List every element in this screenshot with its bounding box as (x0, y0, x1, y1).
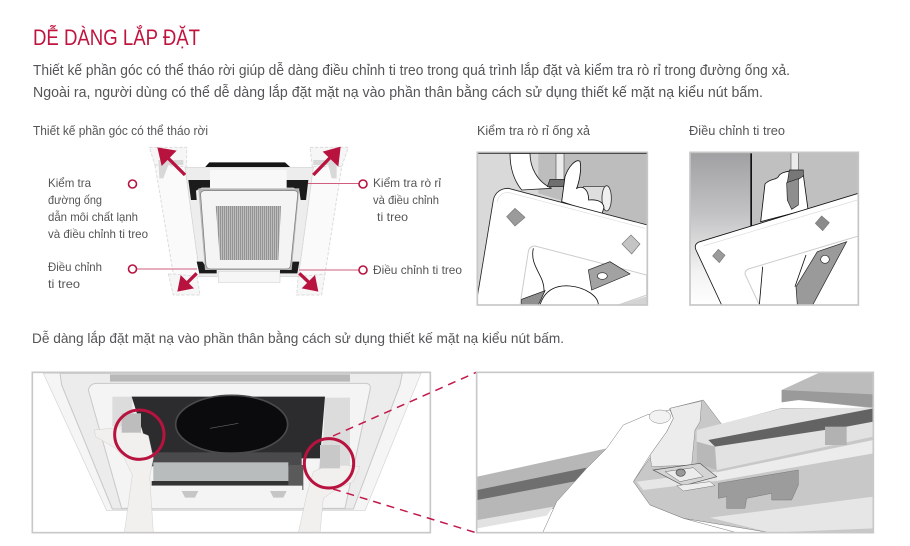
grille (216, 206, 281, 260)
callout: adjust hanger right: Điều chỉnh ti treo (373, 263, 462, 277)
illustration: drain leak check (477, 152, 647, 305)
fingernail (649, 410, 671, 423)
title: DỄ DÀNG LẮP ĐẶT (33, 24, 200, 50)
callout: refrigerant pipe check: dẫn môi chất lạnh (48, 209, 138, 224)
callout: refrigerant pipe check (48, 176, 148, 241)
dark opening (132, 397, 325, 458)
detached corners (149, 147, 348, 295)
callout: leak check: Kiểm tra rò rỉ (373, 176, 441, 190)
light slabs (697, 408, 873, 470)
callout: leak check: và điều chỉnh (373, 193, 439, 207)
callout: refrigerant pipe check: và điều chỉnh ti treo (48, 227, 148, 241)
callout: adjust hanger left: ti treo (48, 277, 80, 291)
black corners (188, 180, 210, 200)
callout: adjust hanger left: Điều chỉnh (48, 260, 102, 274)
illustration: button detail close-up (477, 372, 873, 533)
illustration: hanger adjustment (690, 152, 858, 305)
subheading: push-button panel: Dễ dàng lắp đặt mặt nạ vào phần thân bằng cách sử dụng thiết kế mặt nạ kiểu nút bấm. (32, 330, 564, 346)
metal body (152, 452, 302, 466)
callout: leak check: ti treo (377, 210, 408, 224)
arrows (167, 156, 332, 285)
intro text: Thiết kế phần góc có thể tháo rời giúp dễ dàng điều chỉnh ti treo trong quá trình lắp đặt và kiểm tra rò rỉ trong đường ống xả. (33, 62, 790, 79)
frame (185, 167, 313, 277)
photo panel: panel installation (32, 372, 430, 533)
heading: drain leak check: Kiểm tra rò rỉ ống xả (477, 123, 591, 138)
callout: leak check (373, 176, 441, 224)
callout: refrigerant pipe check: Kiểm tra (48, 176, 91, 190)
left rail (477, 448, 607, 522)
callout: adjust hanger left (48, 260, 102, 291)
panel (198, 188, 299, 270)
intro text (33, 62, 790, 101)
top bar (204, 162, 292, 168)
highlight circles (115, 410, 164, 459)
body (633, 400, 873, 533)
intro text: Ngoài ra, người dùng có thể dễ dàng lắp đặt mặt nạ vào phần thân bằng cách sử dụng thiết kế mặt nạ kiểu nút bấm. (33, 84, 763, 101)
diagram: cassette unit with detachable corners (149, 147, 348, 295)
top right block (782, 372, 873, 408)
lower bracket (718, 470, 798, 508)
fan (176, 395, 288, 453)
left hand (94, 428, 153, 533)
tab (650, 401, 702, 467)
hand (543, 410, 737, 533)
callout lines and markers (128, 180, 367, 274)
heading: detachable corner design: Thiết kế phần góc có thể tháo rời (33, 123, 208, 138)
dashed zoom lines (333, 372, 477, 533)
callout: refrigerant pipe check: đường ống (48, 193, 102, 207)
right hand (298, 465, 360, 533)
push button clip (653, 463, 717, 486)
heading: hanger adjustment: Điều chỉnh ti treo (689, 123, 785, 138)
